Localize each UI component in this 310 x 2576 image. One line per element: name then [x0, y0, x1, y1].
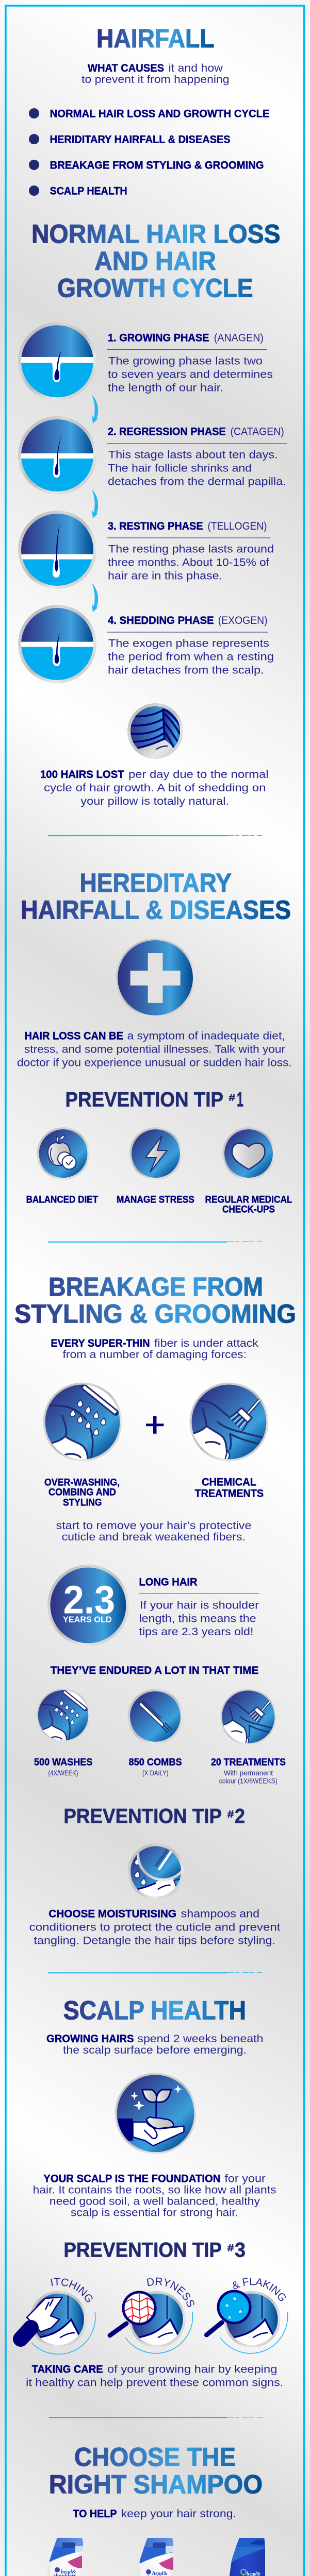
- icon: itching: [13, 2278, 96, 2354]
- bottle: ultra men: [229, 2538, 265, 2576]
- tip 1 labels: REGULAR MEDICAL: [205, 1194, 292, 1206]
- text: to help: TO HELP: [73, 2508, 117, 2520]
- icon: itching: ITCHING: [51, 2278, 93, 2302]
- icon: hair and face: [127, 703, 183, 759]
- icon: regular medical check-ups: [222, 1127, 275, 1180]
- heading: prevention tip 3: 3: [235, 2239, 246, 2261]
- phase 3 text: three months. About 10-15% of: [108, 556, 269, 568]
- arrow: [92, 489, 99, 518]
- phase 1 text: 1. GROWING PHASE: [108, 332, 209, 344]
- text: choose moisturising: CHOOSE MOISTURISING: [48, 1908, 176, 1920]
- icon: flaking: *: [228, 2314, 231, 2323]
- stat labels: (X DAILY): [142, 1769, 169, 1777]
- label: over-washing: STYLING: [63, 1497, 102, 1509]
- text: hair loss can be: [17, 1030, 292, 1069]
- text: growing hairs: [46, 2032, 263, 2056]
- long hair text: If your hair is shoulder: [140, 1599, 259, 1611]
- stat labels: 850 COMBS: [129, 1757, 182, 1768]
- long hair text: tips are 2.3 years old!: [139, 1625, 253, 1638]
- phase 4 text: The exogen phase represents: [108, 637, 269, 649]
- badge: 2.3 years old: [47, 1565, 129, 1646]
- text: hair loss can be: a symptom of inadequate diet,: [127, 1030, 285, 1042]
- phase 2 text: [107, 426, 287, 487]
- heading: normal hair loss: [31, 219, 281, 303]
- text: your scalp is the foundation: scalp is essential for strong hair.: [71, 2207, 238, 2219]
- phase 2 text: detaches from the dermal papilla.: [108, 475, 286, 487]
- text: hair loss can be: doctor if you experience unusual or sudden hair loss.: [17, 1057, 292, 1069]
- badge: 2.3 years old: 2.3: [63, 1578, 115, 1622]
- phase 4 text: [107, 614, 274, 676]
- icon: moisturising and detangling: [128, 1843, 184, 1898]
- bottle: anti-hair fall: head&: [61, 2569, 76, 2575]
- bottle: cool menthol: [138, 2538, 173, 2576]
- text: growing hairs: the scalp surface before emerging.: [63, 2044, 247, 2056]
- label: over-washing: [44, 1477, 120, 1509]
- heading: breakage: [14, 1272, 296, 1329]
- phase 2 text: (CATAGEN): [230, 426, 284, 438]
- icon: flaking: [204, 2277, 288, 2354]
- text: every super-thin fiber: fiber is under attack: [154, 1337, 258, 1349]
- phase 1 text: [107, 332, 273, 394]
- text: 100 hairs lost: cycle of hair growth. A bit of shedding on: [44, 782, 266, 794]
- phase 3 text: 3. RESTING PHASE: [108, 520, 203, 532]
- phase 3 text: [107, 520, 274, 582]
- icon: resting phase follicle: [18, 511, 96, 589]
- heading: prevention tip 3: PREVENTION TIP: [63, 2239, 222, 2261]
- heading: hereditary: HAIRFALL & DISEASES: [21, 895, 291, 924]
- icon: shedding phase follicle: [18, 605, 96, 683]
- heading: scalp health: SCALP HEALTH: [63, 1995, 246, 2025]
- long hair text: length, this means the: [139, 1612, 256, 1624]
- stat labels: [34, 1757, 286, 1785]
- text: hair loss can be: stress, and some potential illnesses. Talk with your: [24, 1043, 285, 1056]
- long hair text: LONG HAIR: [139, 1577, 197, 1588]
- text: hair loss can be: HAIR LOSS CAN BE: [25, 1030, 123, 1042]
- phase 4 text: the period from when a resting: [108, 650, 274, 663]
- icon: chemical treatments: [190, 1383, 268, 1461]
- icon: flaking: *: [239, 2309, 242, 2317]
- icon: comb: [128, 1689, 183, 1744]
- phase 3 text: hair are in this phase.: [108, 569, 222, 582]
- text: taking care: it healthy can help prevent these common signs.: [26, 2377, 283, 2389]
- heading: endured: THEY’VE ENDURED A LOT IN THAT TIME: [51, 1665, 258, 1676]
- text: taking care: TAKING CARE: [32, 2364, 103, 2376]
- contents list: HERIDITARY HAIRFALL & DISEASES: [50, 134, 231, 146]
- label: chemical treatments: CHEMICAL: [202, 1477, 256, 1488]
- text: growing hairs: GROWING HAIRS: [46, 2033, 134, 2045]
- heading: prevention tip 2: 2: [235, 1805, 245, 1828]
- stat labels: 500 WASHES: [34, 1757, 92, 1768]
- contents list: [29, 108, 270, 197]
- heading: normal hair loss: NORMAL HAIR LOSS: [31, 219, 281, 249]
- stat labels: 20 TREATMENTS: [211, 1757, 286, 1768]
- contents list: NORMAL HAIR LOSS AND GROWTH CYCLE: [50, 108, 270, 120]
- phase 3 text: The resting phase lasts around: [108, 543, 274, 555]
- text: choose moisturising: shampoos and: [181, 1908, 259, 1920]
- icon: medical cross: [116, 938, 195, 1018]
- label: chemical treatments: TREATMENTS: [195, 1488, 264, 1500]
- heading: prevention tip 1: PREVENTION TIP: [65, 1089, 223, 1111]
- subtitle: it and how: [168, 62, 223, 74]
- text: taking care: of your growing hair by keeping: [107, 2363, 277, 2376]
- text: taking care: [26, 2363, 283, 2389]
- icon: washes: [37, 1687, 91, 1742]
- tip 1 labels: MANAGE STRESS: [117, 1194, 194, 1206]
- stat labels: (4X/WEEK): [48, 1769, 78, 1777]
- icon: manage stress: [129, 1127, 182, 1180]
- phase 1 text: the length of our hair.: [108, 381, 223, 394]
- phase 1 text: (ANAGEN): [214, 332, 264, 344]
- heading: prevention tip 1: 1: [237, 1089, 243, 1111]
- heading: prevention tip 1: #: [229, 1093, 235, 1103]
- arrow: [92, 583, 99, 612]
- heading: normal hair loss: AND HAIR: [94, 246, 216, 276]
- tip 1 labels: CHECK-UPS: [222, 1204, 275, 1215]
- label: chemical treatments: [195, 1477, 264, 1500]
- subtitle: [81, 62, 230, 86]
- heading: choose the right shampoo: CHOOSE THE: [74, 2443, 236, 2472]
- icon: plant in hand: [115, 2073, 197, 2154]
- subtitle: WHAT CAUSES: [88, 62, 164, 74]
- text: 100 hairs lost: your pillow is totally natural.: [80, 795, 229, 807]
- text: choose moisturising: conditioners to protect the cuticle and prevent: [29, 1921, 281, 1934]
- stat labels: With permanent: [224, 1769, 273, 1777]
- heading: breakage: BREAKAGE FROM: [48, 1272, 263, 1301]
- heading: choose the right shampoo: RIGHT SHAMPOO: [49, 2469, 263, 2499]
- heading: hereditary: [21, 868, 291, 924]
- stat labels: colour (1X/6WEEKS): [219, 1777, 278, 1785]
- icon: growing phase follicle: [18, 322, 96, 400]
- text: your scalp is the foundation: need good soil, a well balanced, healthy: [50, 2195, 260, 2208]
- phase 3 text: (TELLOGEN): [207, 520, 267, 532]
- label: over-washing: OVER-WASHING,: [44, 1477, 120, 1488]
- label: over-washing: COMBING AND: [48, 1487, 116, 1498]
- arrow: [92, 395, 99, 423]
- text: your scalp is the foundation: for your: [224, 2173, 266, 2185]
- text: to help: [73, 2507, 236, 2520]
- tip 1 labels: [26, 1194, 292, 1215]
- phase 2 text: The hair follicle shrinks and: [108, 462, 252, 474]
- text: to help: keep your hair strong.: [121, 2507, 236, 2520]
- text: growing hairs: spend 2 weeks beneath: [137, 2032, 263, 2045]
- heading: prevention tip 2: PREVENTION TIP: [63, 1805, 222, 1828]
- phase 1 text: to seven years and determines: [108, 368, 273, 380]
- text: your scalp is the foundation: hair. It contains the roots, so like how all plants: [33, 2184, 276, 2196]
- heading: choose the right shampoo: [49, 2443, 263, 2499]
- bottle: anti-hair fall: [47, 2538, 83, 2576]
- text: start to remove: cuticle and break weakened fibers.: [62, 1531, 246, 1543]
- phase 4 text: (EXOGEN): [218, 614, 268, 626]
- subtitle: to prevent it from happening: [81, 73, 230, 86]
- text: 100 hairs lost: per day due to the normal: [128, 768, 268, 781]
- heading: prevention tip 2: #: [227, 1809, 234, 1820]
- text: every super-thin fiber: EVERY SUPER-THIN: [51, 1337, 150, 1349]
- text: every super-thin fiber: [51, 1337, 258, 1361]
- heading: hereditary: HEREDITARY: [79, 868, 232, 897]
- plus sign: [146, 1416, 164, 1434]
- phase 4 text: hair detaches from the scalp.: [108, 664, 264, 676]
- contents list: SCALP HEALTH: [50, 185, 127, 197]
- text: your scalp is the foundation: YOUR SCALP IS THE FOUNDATION: [43, 2173, 220, 2185]
- text: 100 hairs lost: 100 HAIRS LOST: [40, 769, 124, 781]
- text: every super-thin fiber: from a number of damaging forces:: [63, 1348, 247, 1361]
- icon: flaking: *: [233, 2296, 236, 2304]
- icon: regression phase follicle: [18, 416, 96, 495]
- heading: normal hair loss: GROWTH CYCLE: [57, 274, 253, 303]
- text: start to remove: [56, 1519, 252, 1543]
- phase 2 text: This stage lasts about ten days.: [108, 448, 278, 461]
- text: choose moisturising: tangling. Detangle the hair tips before styling.: [34, 1935, 275, 1947]
- phase 2 text: 2. REGRESSION PHASE: [108, 426, 226, 438]
- text: your scalp is the foundation: [33, 2173, 276, 2219]
- text: start to remove: start to remove your hair’s protective: [56, 1519, 252, 1532]
- phase 4 text: 4. SHEDDING PHASE: [108, 615, 214, 626]
- text: choose moisturising: [29, 1908, 281, 1947]
- text: 100 hairs lost: [40, 768, 268, 807]
- contents list: BREAKAGE FROM STYLING & GROOMING: [50, 160, 264, 172]
- phase 1 text: The growing phase lasts two: [108, 354, 263, 367]
- tip 1 labels: BALANCED DIET: [26, 1194, 98, 1206]
- icon: flaking: *: [225, 2302, 229, 2311]
- long hair text: [139, 1577, 259, 1638]
- icon: treatments: [220, 1689, 276, 1744]
- icon: over-washing: [43, 1380, 124, 1461]
- icon: dryness: [107, 2277, 194, 2354]
- icon: balanced diet: [37, 1127, 90, 1180]
- title: HAIRFALL: [96, 24, 215, 53]
- icon: flaking: & FLAKING: [233, 2277, 286, 2301]
- icon: dryness: DRYNESS: [146, 2277, 194, 2307]
- heading: breakage: STYLING & GROOMING: [14, 1299, 296, 1329]
- heading: prevention tip 3: #: [227, 2243, 234, 2253]
- badge: 2.3 years old: YEARS OLD: [63, 1615, 112, 1624]
